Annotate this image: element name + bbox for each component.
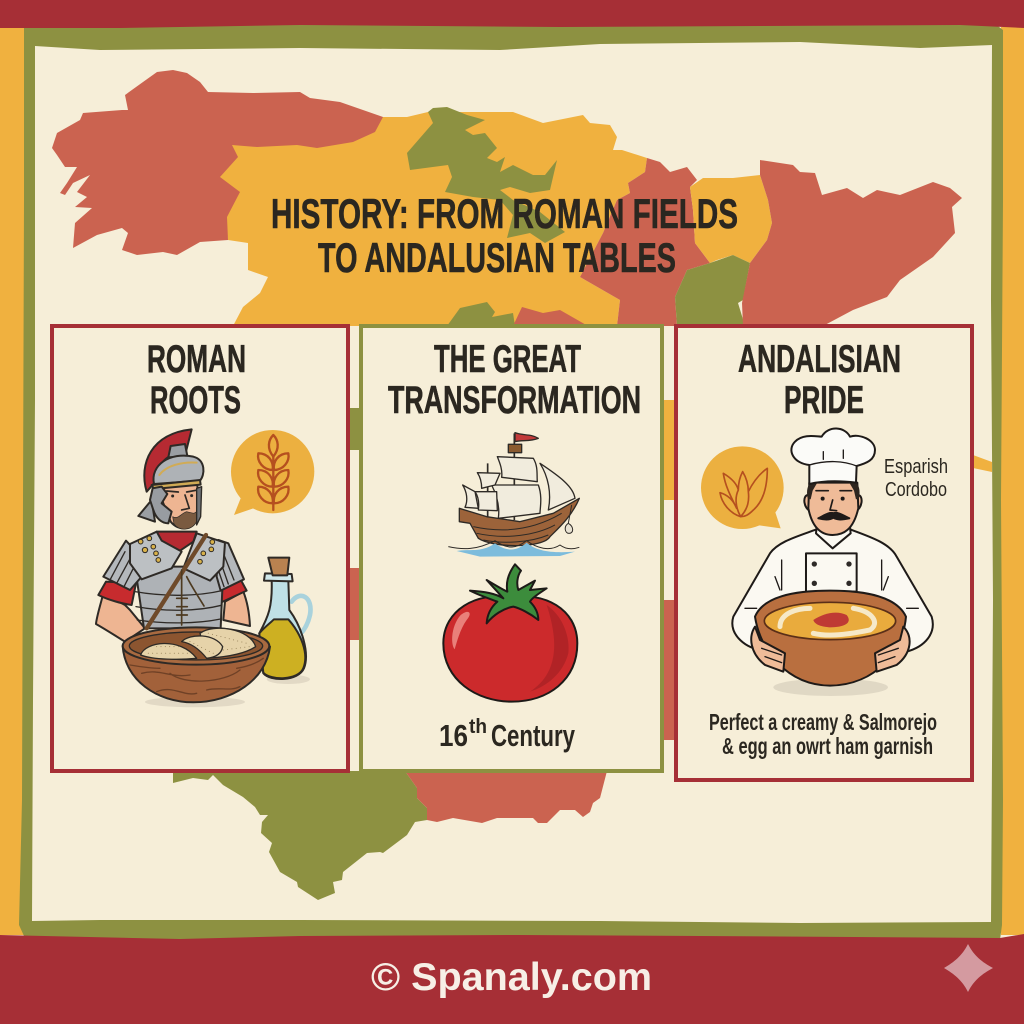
chef body (732, 529, 933, 652)
map strip between cards: red (349, 568, 361, 640)
panel: Roman Roots (52, 326, 348, 771)
illustration: sailing ship (448, 433, 579, 557)
wave line (448, 541, 579, 549)
ship flag (515, 433, 538, 442)
soldier neck guard (138, 500, 155, 522)
panel heading: The Great Transformation: THE GREAT (434, 338, 581, 381)
panel heading: Andalisian Pride: PRIDE (784, 379, 864, 422)
bowl grain (130, 658, 263, 694)
chef collar (816, 527, 851, 548)
map region: northwest red (52, 70, 383, 255)
jug rim (264, 573, 293, 581)
panel heading: Andalisian Pride: ANDALISIAN (738, 338, 901, 381)
side label: Esparish Cordobo: Esparish (884, 456, 948, 478)
chef hat pleats (809, 450, 857, 466)
bowl soup (764, 602, 896, 640)
map region: small olive (447, 302, 515, 326)
armour bands (135, 591, 222, 623)
chef face (808, 483, 858, 535)
jug oil (259, 619, 305, 678)
ship mast (488, 433, 514, 520)
armour torso (135, 567, 223, 628)
chef right hand (875, 627, 910, 672)
ship sails (463, 457, 575, 518)
chef jacket button (846, 561, 852, 567)
tomato highlight (452, 612, 470, 649)
right yellow edge (1001, 27, 1024, 935)
chef hair left (807, 483, 817, 499)
title: HISTORY: FROM ROMAN FIELDS (271, 190, 738, 237)
panel: The Great Transformation (361, 326, 662, 771)
map region: southwest olive (173, 771, 427, 900)
tomato shade (530, 605, 569, 692)
jug glass (259, 580, 306, 679)
map region: north olive (407, 107, 565, 243)
map region: east olive (675, 255, 750, 326)
panel heading: Roman Roots: ROOTS (150, 379, 241, 422)
soldier arms (96, 592, 250, 642)
helmet crest holder (168, 444, 187, 457)
helmet dome (153, 456, 203, 484)
bread (141, 628, 256, 659)
ham garnish (813, 613, 849, 627)
caption: salmorejo (709, 709, 937, 759)
panel heading: The Great Transformation (388, 338, 641, 422)
chef hat (791, 429, 875, 484)
bowl interior (129, 632, 263, 660)
left hand fingers (762, 648, 782, 663)
map region: middle red (580, 158, 710, 326)
soup cream swirl (780, 608, 875, 635)
wooden bowl (123, 646, 270, 702)
shoulder guard stripes (110, 552, 234, 587)
armour rivets (138, 536, 215, 564)
helmet brim (152, 480, 201, 489)
chef jacket button (812, 561, 817, 567)
panel heading: Roman Roots (147, 338, 246, 422)
jug handle (292, 596, 310, 637)
icon: sparkle star (944, 944, 993, 992)
caption: 16th Century: th (469, 716, 487, 738)
helmet crest (144, 429, 192, 492)
ship hull (459, 498, 579, 546)
chef hair right (849, 483, 860, 499)
bowl shadow (145, 697, 245, 707)
bowl rim (123, 627, 269, 665)
illustration: tomato (443, 564, 577, 702)
map strip between cards: yellow (663, 400, 674, 500)
caption: 16th Century: Century (491, 718, 576, 753)
chef jacket button (846, 581, 852, 586)
red neck scarf (157, 532, 197, 551)
oil jug (259, 558, 310, 684)
map strip: right yellow (973, 455, 992, 472)
chef ears (804, 495, 862, 511)
caption: salmorejo: & egg an owrt ham garnish (722, 733, 933, 759)
bottom red band (0, 934, 1024, 1024)
armour shoulder guards (103, 540, 244, 591)
jacket sleeve lines (745, 560, 918, 608)
sea waves (457, 543, 575, 557)
chef moustache (818, 513, 849, 520)
helmet right cheek (197, 487, 202, 525)
soldier red sleeves (98, 578, 247, 605)
panel heading: Andalisian Pride (738, 338, 901, 422)
ship rigging (565, 505, 573, 533)
jug cork (268, 558, 289, 575)
chef left hand (751, 627, 785, 672)
hull planks (473, 513, 562, 542)
chef jacket button (812, 581, 817, 586)
chef jacket panel with buttons (806, 553, 857, 592)
soldier face (162, 483, 198, 528)
caption: 16th Century: 16 (439, 718, 468, 753)
crow's nest (508, 444, 522, 453)
map strip between cards: olive (349, 408, 361, 450)
title (271, 190, 738, 281)
leather strap (147, 535, 206, 628)
armour chest plates (130, 532, 225, 581)
tomato leaves (470, 564, 547, 623)
side label: Esparish Cordobo: Cordobo (885, 479, 947, 501)
title: TO ANDALUSIAN TABLES (318, 234, 676, 281)
eyes and nose (167, 490, 196, 510)
map region: south red (405, 771, 607, 823)
map region: east yellow (690, 175, 772, 263)
map region: small red (513, 307, 588, 326)
clay bowl (755, 591, 906, 686)
caption: 16th Century (439, 716, 576, 753)
belt strings (177, 570, 204, 625)
helmet cheek guard (150, 487, 172, 523)
map strip between cards: lower red (663, 600, 674, 740)
side label: Esparish Cordobo (884, 456, 948, 501)
footer brand: © Spanaly.com (371, 956, 652, 999)
panel heading: Roman Roots: ROMAN (147, 338, 246, 381)
illustration: chef holding salmorejo bowl (701, 429, 933, 696)
soldier beard (173, 511, 197, 529)
left yellow edge (0, 27, 24, 935)
illustration: Roman soldier with bread bowl and olive oil (96, 429, 314, 707)
map region: central yellow (220, 112, 647, 326)
bread speckles (148, 633, 250, 653)
panel heading: The Great Transformation: TRANSFORMATION (388, 379, 641, 422)
helmet trim (159, 462, 197, 475)
caption: salmorejo: Perfect a creamy & Salmorejo (709, 709, 937, 735)
panel: Andalisian Pride (676, 326, 972, 780)
jug shadow (267, 675, 310, 684)
bowl shadow (773, 679, 888, 696)
map of Spain (52, 70, 992, 900)
top red band (0, 0, 1024, 28)
chef eyes and brows (816, 491, 852, 511)
tomato body (443, 596, 577, 702)
icon: leaf speech bubble (701, 446, 784, 529)
map region: northeast red (742, 160, 962, 326)
icon: wheat speech bubble (231, 430, 314, 515)
right hand fingers (878, 648, 898, 663)
